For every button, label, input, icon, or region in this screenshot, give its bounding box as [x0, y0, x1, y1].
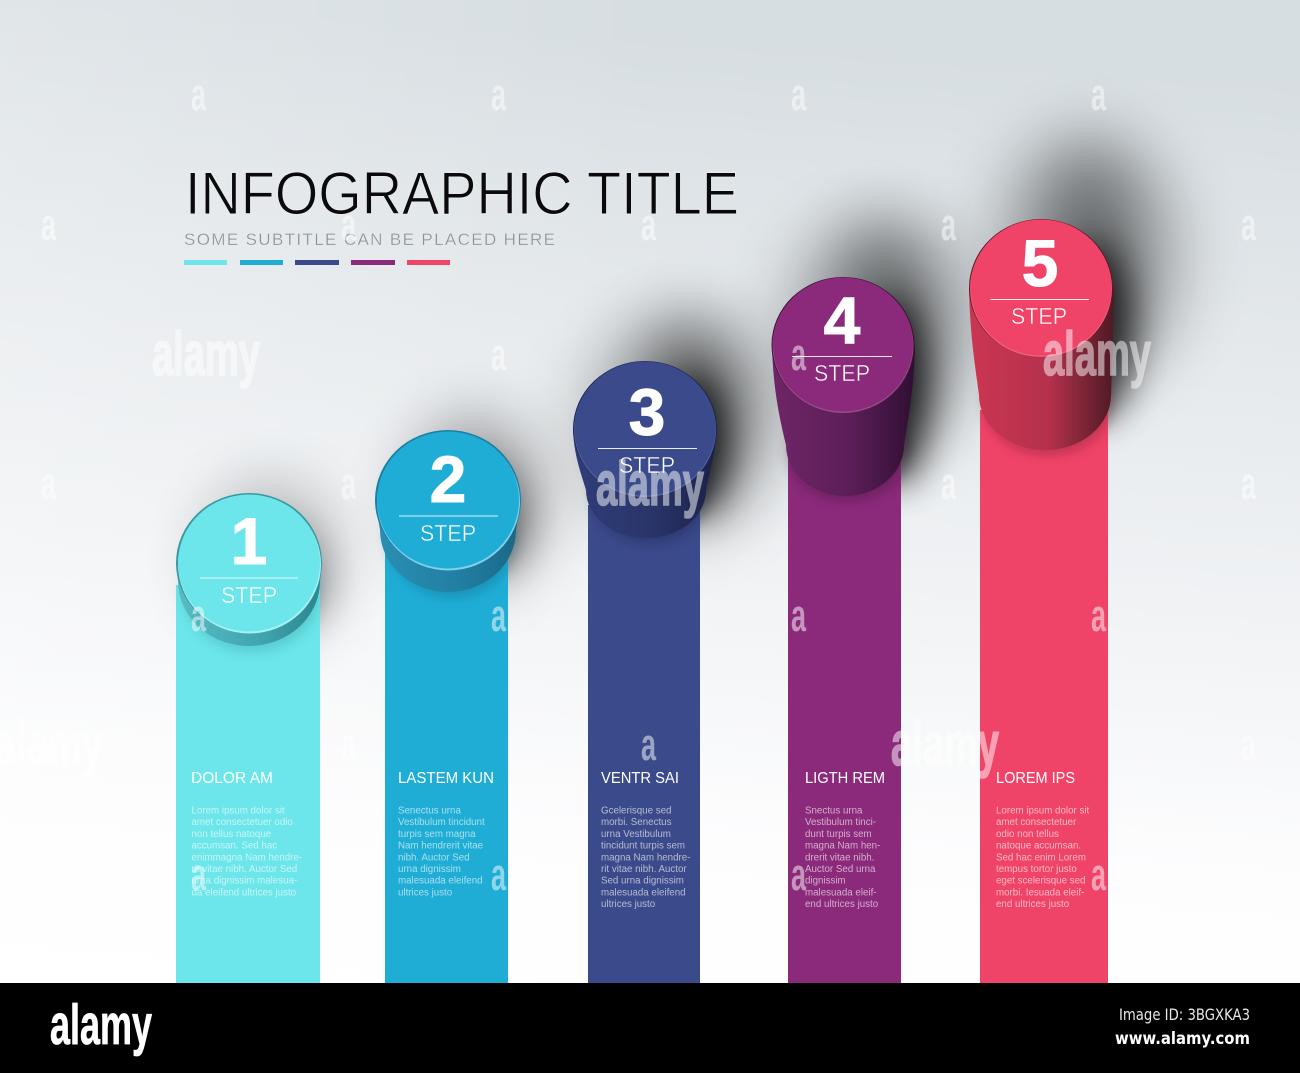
number 2: 2	[430, 442, 466, 516]
watermarks: a	[491, 329, 507, 380]
footer logo: alamy	[50, 993, 152, 1057]
watermarks: a	[41, 719, 57, 770]
watermarks: a	[341, 199, 357, 250]
watermarks: alamy	[152, 320, 260, 389]
text block: step 1: amet consectetuer odio	[192, 817, 293, 828]
watermarks: a	[1091, 849, 1107, 900]
text block: step 5: amet consectetuer	[996, 817, 1077, 828]
watermarks: a	[491, 590, 507, 641]
watermarks: a	[341, 458, 357, 509]
panel: step 3 bar	[588, 505, 700, 983]
text block: step 4: end ultrices justo	[805, 899, 879, 910]
watermarks: a	[791, 849, 807, 900]
text block: step 2: Senectus urna	[398, 806, 461, 816]
text block: step 3: malesuada eleifend	[601, 887, 686, 898]
text block: step 3: urna Vestibulum	[601, 829, 671, 840]
label: step 2: STEP	[420, 520, 476, 546]
heading: step 5: LOREM IPS	[996, 770, 1075, 787]
text block: step 5: tempus tortor justo	[996, 864, 1077, 875]
watermarks: a	[41, 199, 57, 250]
watermarks: alamy	[891, 710, 999, 779]
watermarks: alamy	[1043, 320, 1151, 389]
text block: step 1: accumsan. Sed hac	[192, 841, 277, 852]
label: step 4: STEP	[814, 360, 870, 386]
text block: step 2: ultrices justo	[398, 887, 453, 898]
text block: step 2: malesuada eleifend	[398, 876, 483, 887]
footer url: www.alamy.com	[1115, 1029, 1250, 1049]
number 5: 5	[1022, 226, 1058, 300]
text block: step 5: morbi. Iesuada eleif-	[996, 887, 1084, 898]
text block: step 5: eget scelerisque sed	[996, 876, 1085, 887]
text block: step 3: Gcelerisque sed	[601, 806, 671, 816]
text block: step 2: urna dignissim	[398, 864, 461, 875]
cylinder 5	[969, 219, 1114, 454]
text block: step 2: nibh. Auctor Sed	[398, 852, 470, 863]
subtitle: SOME SUBTITLE CAN BE PLACED HERE	[184, 230, 555, 249]
text block: step 3: magna Nam hendre-	[601, 852, 690, 863]
text block: step 1: non tellus natoque	[192, 829, 271, 840]
watermarks: alamy	[596, 450, 704, 519]
text block: step 5: Lorem ipsum dolor sit	[996, 806, 1089, 816]
title: INFOGRAPHIC TITLE	[185, 160, 739, 227]
watermarks: a	[191, 590, 207, 641]
text block: step 4: malesuada eleif-	[805, 887, 877, 898]
panel: step 5 bar	[980, 410, 1108, 983]
text block: step 4: dignissim	[805, 876, 846, 887]
cast shadows behind cylinders	[208, 130, 1190, 632]
text block: step 4: Auctor Sed urna	[805, 864, 876, 875]
text block: step 2: Nam hendrerit vitae	[398, 841, 483, 852]
watermarks: a	[1241, 719, 1257, 770]
footer image id: Image ID: 3BGXKA3	[1119, 1005, 1250, 1024]
text block: step 4: Snectus urna	[805, 806, 863, 816]
text block: step 4: dunt turpis sem	[805, 829, 872, 840]
text block: step 4: magna Nam hen-	[805, 841, 880, 852]
text block: step 1: enimmagna Nam hendre-	[192, 852, 302, 863]
heading: step 1: DOLOR AM	[191, 770, 273, 787]
watermarks: a	[941, 458, 957, 509]
text block: step 5: odio non tellus	[996, 829, 1059, 840]
heading: step 4: LIGTH REM	[805, 770, 885, 787]
text block: step 3: tincidunt turpis sem	[601, 841, 685, 852]
cylinder 4	[772, 277, 915, 500]
watermarks: a	[791, 329, 807, 380]
watermarks: a	[191, 849, 207, 900]
text block: step 3: Sed urna dignissim	[601, 876, 684, 887]
watermarks: a	[341, 719, 357, 770]
text block: step 2: turpis sem magna	[398, 829, 476, 840]
watermarks: a	[191, 69, 207, 120]
text block: step 2: Vestibulum tincidunt	[398, 817, 485, 828]
label: step 3: STEP	[619, 452, 675, 478]
number 4: 4	[824, 283, 861, 357]
text block: step 4: drerit vitae nibh.	[805, 852, 874, 863]
text block: step 4: Vestibulum tinci-	[805, 817, 876, 828]
text block: step 1: rit vitae nibh. Auctor Sed	[192, 864, 297, 875]
text block: step 5: natoque accumsan.	[996, 841, 1081, 852]
heading: step 3: VENTR SAI	[601, 770, 679, 787]
heading: step 2: LASTEM KUN	[398, 770, 494, 787]
cylinder 2	[375, 430, 521, 597]
panel: step 2 bar	[385, 545, 508, 983]
text block: step 3: morbi. Senectus	[601, 817, 672, 828]
legend colour dashes	[184, 260, 450, 265]
watermarks	[0, 69, 1257, 900]
watermarks: a	[1241, 458, 1257, 509]
watermarks: a	[791, 590, 807, 641]
label: step 1: STEP	[221, 582, 277, 608]
cylinder 3	[573, 361, 717, 542]
watermarks: a	[791, 69, 807, 120]
text block: step 5: Sed hac enim Lorem	[996, 852, 1086, 863]
watermarks: a	[491, 69, 507, 120]
text block: step 1: da eleifend ultrices justo	[192, 887, 297, 898]
number 1: 1	[231, 504, 267, 578]
cylinder 1	[176, 493, 322, 652]
watermarks: a	[41, 458, 57, 509]
watermarks: alamy	[0, 710, 103, 779]
number 3: 3	[629, 375, 665, 449]
text block: step 1: urna dignissim malesua-	[192, 876, 297, 887]
watermarks: a	[1241, 199, 1257, 250]
watermarks: a	[641, 199, 657, 250]
watermarks: a	[1091, 590, 1107, 641]
text block: step 3: rit vitae nibh. Auctor	[601, 864, 687, 875]
panel: step 1 bar	[176, 585, 320, 983]
watermarks: a	[1091, 69, 1107, 120]
text block: step 5: end ultrices justo	[996, 899, 1070, 910]
panel: step 4 bar	[788, 455, 901, 983]
text block: step 1: Lorem ipsum dolor sit	[192, 806, 285, 816]
label: step 5: STEP	[1011, 303, 1067, 329]
text block: step 3: ultrices justo	[601, 899, 656, 910]
watermarks: a	[641, 719, 657, 770]
footer bar	[0, 983, 1300, 1073]
watermarks: a	[941, 199, 957, 250]
watermarks: a	[491, 849, 507, 900]
